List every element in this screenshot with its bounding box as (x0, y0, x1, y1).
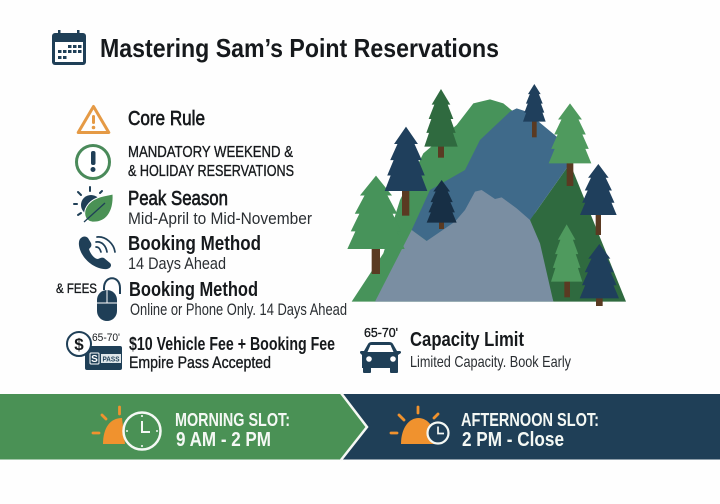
text: afternoon slot time: 2 PM - Close (462, 429, 564, 451)
text: online or phone: Online or Phone Only. 14 Days Ahead (130, 300, 347, 319)
icon: afternoon sun and clock (391, 407, 448, 444)
icon: dollar and pass: PASS (102, 356, 120, 364)
item: mandatory reservations (76, 144, 294, 180)
text: season dates: Mid-April to Mid-November (128, 209, 312, 228)
icon: exclamation circle (76, 146, 110, 178)
icon: dollar and pass (67, 332, 122, 370)
title: Mastering Sam’s Point Reservations (100, 33, 499, 63)
arrow edge (341, 393, 367, 460)
header (52, 30, 499, 65)
heading: vehicle fee: $10 Vehicle Fee + Booking Fee (129, 334, 335, 354)
heading: core rule: Core Rule (128, 108, 205, 130)
icon: warning triangle (78, 106, 109, 132)
text: limited capacity: Limited Capacity. Book Early (410, 354, 571, 371)
text: afternoon slot label: AFTERNOON SLOT: (461, 410, 599, 430)
item: capacity limit (360, 325, 571, 373)
tree: navy right (580, 164, 617, 235)
icon: car (360, 342, 401, 373)
text: mandatory line 1: MANDATORY WEEKEND & (128, 144, 293, 161)
text: empire pass: Empire Pass Accepted (129, 353, 271, 372)
heading: capacity limit: Capacity Limit (410, 329, 524, 351)
text: morning slot label: MORNING SLOT: (175, 410, 290, 430)
tree: navy left (385, 127, 427, 216)
text: morning slot time: 9 AM - 2 PM (176, 429, 271, 451)
mountain: gray (375, 190, 553, 302)
heading: peak season: Peak Season (128, 188, 228, 210)
item: booking window (79, 233, 261, 273)
tree: light green right (549, 103, 591, 186)
heading: booking method: Booking Method (129, 279, 258, 301)
tree: navy lower (580, 244, 619, 306)
icon: dollar and pass: S (91, 354, 98, 365)
mountain: back green (352, 99, 553, 302)
icon: calendar (52, 30, 86, 65)
item: peak season (74, 187, 312, 228)
tree: light green left (347, 176, 405, 274)
band background: green arrow (0, 394, 367, 460)
tree: dark navy centre (427, 180, 457, 229)
mountain: blue (412, 108, 570, 247)
icon: mouse (97, 278, 120, 321)
label: vehicle length: 65-70' (92, 332, 120, 344)
label: vehicle length: 65-70' (364, 325, 398, 340)
band: afternoon slot (340, 394, 720, 460)
icon: morning sun and clock (93, 407, 160, 450)
mountain: dark green (530, 163, 626, 302)
tree: dark green top (424, 89, 458, 158)
band background: navy (340, 394, 720, 460)
heading: booking method: Booking Method (128, 233, 261, 255)
tree: light green lower (551, 224, 582, 297)
icon: sun and leaf (74, 187, 113, 222)
text: mandatory line 2: & HOLIDAY RESERVATIONS (128, 163, 294, 180)
label: and fees: & FEES (56, 280, 97, 296)
icon: dollar and pass: $ (74, 335, 84, 354)
text: days ahead: 14 Days Ahead (128, 254, 226, 273)
band: morning slot (0, 393, 367, 460)
item: fees (67, 332, 335, 372)
item: online booking (56, 278, 347, 321)
tree: navy top (523, 84, 546, 137)
item: core rule (78, 106, 205, 132)
illustration: mountains and trees (347, 84, 626, 306)
icon: phone (79, 236, 115, 269)
